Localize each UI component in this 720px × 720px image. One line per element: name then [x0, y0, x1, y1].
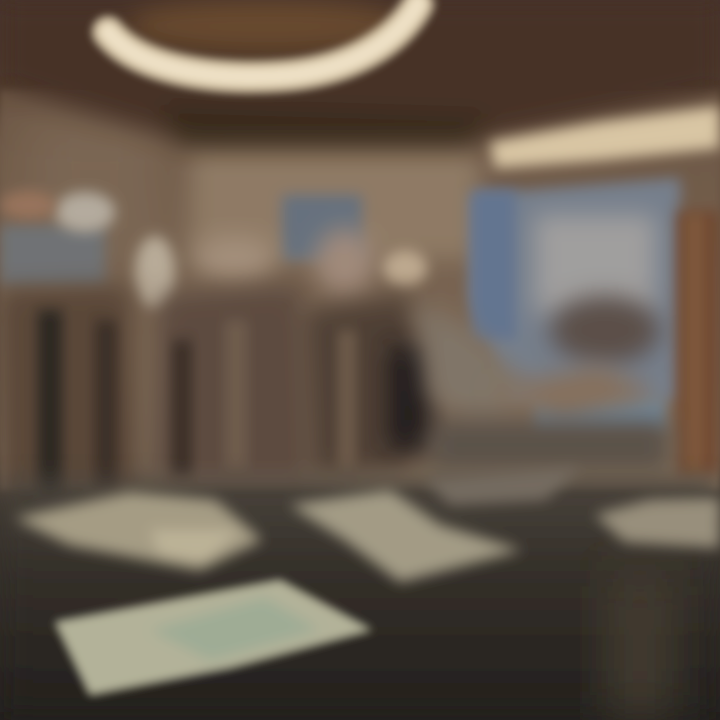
group of suited figures — [0, 191, 670, 500]
paper: back centre — [425, 468, 580, 505]
ceiling — [0, 0, 720, 145]
floor — [0, 480, 720, 720]
paper: foreground banknotes — [55, 580, 372, 695]
wooden column — [676, 210, 720, 475]
paper: left — [15, 492, 262, 570]
background wall — [0, 90, 720, 490]
blue wall panel — [282, 195, 362, 260]
paper: centre — [290, 490, 522, 582]
right strip light — [490, 106, 720, 168]
large blue window — [470, 178, 680, 432]
paper: right — [595, 498, 720, 548]
ring ceiling light — [108, 4, 418, 77]
